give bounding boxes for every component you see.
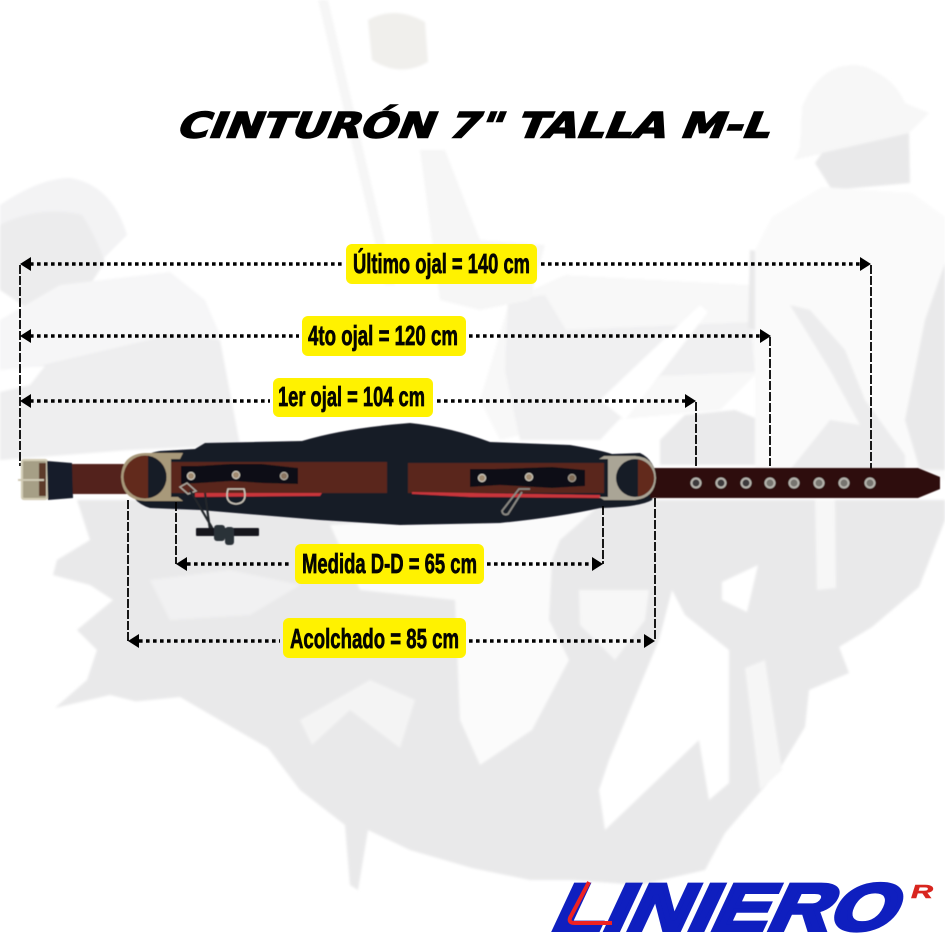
left worker hat bbox=[0, 178, 127, 285]
dimension: 4to ojal bbox=[20, 316, 771, 466]
left black tab with rivets bbox=[181, 464, 298, 484]
dimension: último ojal: Último ojal = 140 cm bbox=[353, 248, 530, 279]
right worker face bbox=[815, 133, 910, 190]
small left clip bbox=[180, 483, 196, 494]
left D-ring bbox=[121, 453, 183, 501]
lower workers bbox=[53, 500, 945, 890]
right D-ring bbox=[599, 456, 656, 500]
dimension: acolchado: Acolchado = 85 cm bbox=[290, 623, 459, 654]
right wire clip bbox=[502, 489, 530, 515]
light holes bbox=[330, 505, 600, 765]
T-handle lanyard bbox=[190, 490, 259, 545]
right worker torso bbox=[755, 187, 945, 480]
small D-ring bbox=[227, 489, 245, 504]
dimension: 1er ojal: 1er ojal = 104 cm bbox=[278, 381, 425, 412]
dimension: último ojal bbox=[20, 244, 871, 470]
dimension: 1er ojal bbox=[20, 378, 696, 466]
dimension: medida D-D: Medida D-D = 65 cm bbox=[302, 548, 477, 579]
pulley and pole bbox=[368, 13, 428, 70]
left worker face bbox=[0, 212, 105, 310]
black keeper bbox=[47, 461, 73, 500]
belt bbox=[18, 423, 940, 545]
center-right brown strap bbox=[408, 463, 604, 493]
long tongue with grommets bbox=[650, 468, 940, 498]
buckle bbox=[18, 460, 47, 499]
center-left brown strap bbox=[168, 462, 387, 493]
red lining bbox=[195, 492, 600, 498]
dimension: acolchado bbox=[128, 498, 655, 658]
padded black lumbar section bbox=[126, 423, 657, 525]
title: CINTURÓN 7" TALLA M-L bbox=[172, 104, 782, 146]
right black tab with rivets bbox=[470, 467, 585, 488]
right worker helmet bbox=[794, 65, 929, 160]
center machinery bbox=[480, 275, 760, 440]
logo: Liniero: R bbox=[911, 882, 933, 902]
dimension: medida D-D bbox=[176, 502, 603, 584]
left worker shoulder bbox=[0, 272, 220, 460]
grommets bbox=[692, 478, 874, 488]
dimension: 4to ojal: 4to ojal = 120 cm bbox=[308, 320, 458, 351]
logo: Liniero: LINIERO bbox=[542, 870, 919, 944]
left strap with buckle end bbox=[68, 464, 135, 494]
